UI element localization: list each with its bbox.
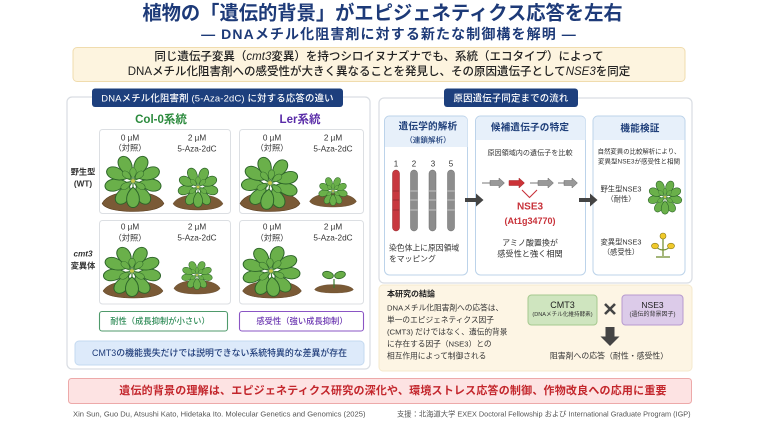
summary box: 同じ遺伝子変異（cmt3変異）を持つシロイヌナズナでも、系統（エコタイプ）によって <box>154 49 604 63</box>
arrow: to inhibitor response <box>600 327 620 346</box>
card: functional validation: （耐性） <box>606 194 636 204</box>
icon: mutant yellow plant <box>652 233 674 257</box>
gene name NSE3: NSE3 <box>517 202 543 212</box>
row label: cmt3: 変異体 <box>71 260 96 270</box>
conclusion text: に存在する因子（NSE3）との <box>387 338 492 348</box>
panel: right, gene identification flow <box>379 88 692 283</box>
cell: Ler cmt3: 0 µM <box>263 222 281 232</box>
card: functional validation <box>593 116 685 275</box>
box: CMT3: (DNAメチル化維持酵素) <box>532 310 593 318</box>
gene name NSE3: (At1g34770) <box>504 216 556 226</box>
cell: Ler cmt3: 5-Aza-2dC <box>313 234 353 242</box>
conclusion text: (CMT3) だけではなく、遺伝的背景 <box>387 326 508 336</box>
gene arrows <box>482 178 578 198</box>
heading: Ler: Ler系統 <box>280 112 321 126</box>
conclusion text <box>387 302 508 360</box>
cell: Col-0 cmt3: 2 µM <box>188 222 206 232</box>
plant: Col-0 WT control <box>102 154 164 212</box>
card: genetic analysis: （連鎖解析） <box>405 134 451 144</box>
cell: Ler wild type: 5-Aza-2dC <box>313 144 353 154</box>
icon: wild-type plant <box>647 180 683 214</box>
citation: Xin Sun, Guo Du, Atsushi Kato, Hidetaka Ito. Molecular Genetics and Genomics (2025) <box>73 410 366 418</box>
conclusion text: DNAメチル化阻害剤への応答は、 <box>387 302 503 312</box>
cell: Col-0 cmt3 <box>100 220 230 304</box>
row label: wild type <box>71 166 95 188</box>
chromosomes: 2 <box>412 160 417 168</box>
subtitle: — DNAメチル化阻害剤に対する新たな制御構を解明 — <box>201 26 577 42</box>
box: NSE3 <box>622 295 683 325</box>
callout: lineage-specific difference: CMT3の機能喪失だけでは説明できない系統特異的な差異が存在 <box>92 347 347 358</box>
cell: Ler cmt3: （対照） <box>256 232 288 242</box>
left panel heading <box>92 88 343 107</box>
card: functional validation: 変異型NSE3 <box>601 238 641 246</box>
arrow: genetic analysis to candidate <box>465 194 484 206</box>
plant: Ler cmt3 control <box>238 243 304 299</box>
heading: Col-0: Col-0系統 <box>135 112 187 126</box>
card: functional validation: 野生型NSE3 <box>601 184 641 194</box>
card: candidate gene: アミノ酸置換が <box>502 238 558 248</box>
summary box <box>73 48 685 82</box>
chromosomes: 5 <box>449 160 454 168</box>
banner: significance: 遺伝的背景の理解は、エピジェネティクス研究の深化や、環境ストレス応答の制御、作物改良への応用に重要 <box>119 383 667 397</box>
card: genetic analysis: 染色体上に原因領域 <box>389 242 459 252</box>
right panel heading <box>444 88 578 107</box>
left panel heading: DNAメチル化阻害剤 (5-Aza-2dC) に対する応答の違い <box>101 92 334 104</box>
card: functional validation: 変異型NSE3が感受性と相関 <box>598 156 680 166</box>
cell: Col-0 cmt3: 5-Aza-2dC <box>177 234 217 242</box>
result: tolerant: 耐性（成長抑制が小さい） <box>110 316 210 326</box>
card: functional validation: 自然変異の比較解析により、 <box>598 146 680 156</box>
right panel heading: 原因遺伝子同定までの流れ <box>454 92 569 104</box>
row label: cmt3 <box>71 250 96 270</box>
conclusion heading: 本研究の結論 <box>387 288 435 298</box>
card: candidate gene <box>476 116 586 275</box>
cell: Ler wild type: 0 µM <box>263 134 281 142</box>
row label: cmt3: cmt3 <box>73 250 93 258</box>
plant: Ler WT control <box>237 153 303 213</box>
result: tolerant <box>100 312 228 331</box>
banner: significance <box>68 378 692 404</box>
card: functional validation: （感受性） <box>603 248 639 256</box>
chromosomes: 3 <box>431 160 436 168</box>
cell: Col-0 wild type: 0 µM <box>121 134 139 142</box>
plant: Ler WT treated <box>310 176 356 207</box>
conclusion text: 相互作用によって制御される <box>387 350 486 360</box>
cell: Ler cmt3 <box>238 220 364 304</box>
result: sensitive: 感受性（強い成長抑制） <box>256 316 348 326</box>
cell: Col-0 wild type: （対照） <box>114 142 146 152</box>
cell: Col-0 wild type: 2 µM <box>188 134 206 142</box>
callout: lineage-specific difference <box>75 341 364 365</box>
row label: wild type: (WT) <box>74 180 92 188</box>
box: CMT3: CMT3 <box>550 300 575 310</box>
card: functional validation: 機能検証 <box>620 122 660 134</box>
result: sensitive <box>240 312 364 331</box>
chromosomes <box>392 160 454 231</box>
card: genetic analysis: 遺伝学的解析 <box>399 120 458 132</box>
box: CMT3 <box>528 295 597 325</box>
panel: conclusion <box>379 285 692 371</box>
card: genetic analysis <box>384 116 468 275</box>
cell: Ler wild type <box>237 130 364 214</box>
card: candidate gene: 候補遺伝子の特定 <box>491 122 569 134</box>
inhibitor response text: 阻害剤への応答（耐性・感受性） <box>550 350 668 360</box>
chromosomes: 1 <box>394 160 399 168</box>
gene name NSE3 <box>504 202 556 226</box>
box: NSE3: (遺伝的背景因子) <box>630 310 676 318</box>
card: candidate gene: 感受性と強く相関 <box>497 248 563 258</box>
cell: Col-0 wild type: 5-Aza-2dC <box>177 144 217 154</box>
plant: Col-0 WT treated <box>173 167 223 210</box>
cell: Col-0 cmt3: （対照） <box>114 232 146 242</box>
card: candidate gene: 原因領域内の遺伝子を比較 <box>487 148 573 157</box>
plant: Ler cmt3 treated seedling <box>314 270 354 293</box>
row label: wild type: 野生型 <box>71 166 95 176</box>
arrow: candidate to validation <box>579 194 598 206</box>
cell: Col-0 cmt3: 0 µM <box>121 222 139 232</box>
plant: Col-0 cmt3 treated <box>174 260 220 294</box>
plant: Col-0 cmt3 control <box>102 245 163 298</box>
cell: Ler wild type: （対照） <box>256 142 288 152</box>
title: 植物の「遺伝的背景」がエピジェネティクス応答を左右 <box>142 2 623 24</box>
funding note: 支援：北海道大学 EXEX Doctoral Fellowship および International Graduate Program (IGP) <box>397 410 691 418</box>
card: genetic analysis: をマッピング <box>389 254 436 264</box>
box: NSE3: NSE3 <box>641 300 664 310</box>
cell: Ler cmt3: 2 µM <box>324 222 342 232</box>
conclusion text: 単一のエピジェネティクス因子 <box>387 314 494 324</box>
panel: left, response differences <box>67 88 370 369</box>
cell: Ler wild type: 2 µM <box>324 134 342 142</box>
summary box: DNAメチル化阻害剤への感受性が大きく異なることを発見し、その原因遺伝子としてNSE3を同定 <box>128 64 631 78</box>
icon: multiply <box>605 304 615 314</box>
cell: Col-0 wild type <box>100 130 230 214</box>
